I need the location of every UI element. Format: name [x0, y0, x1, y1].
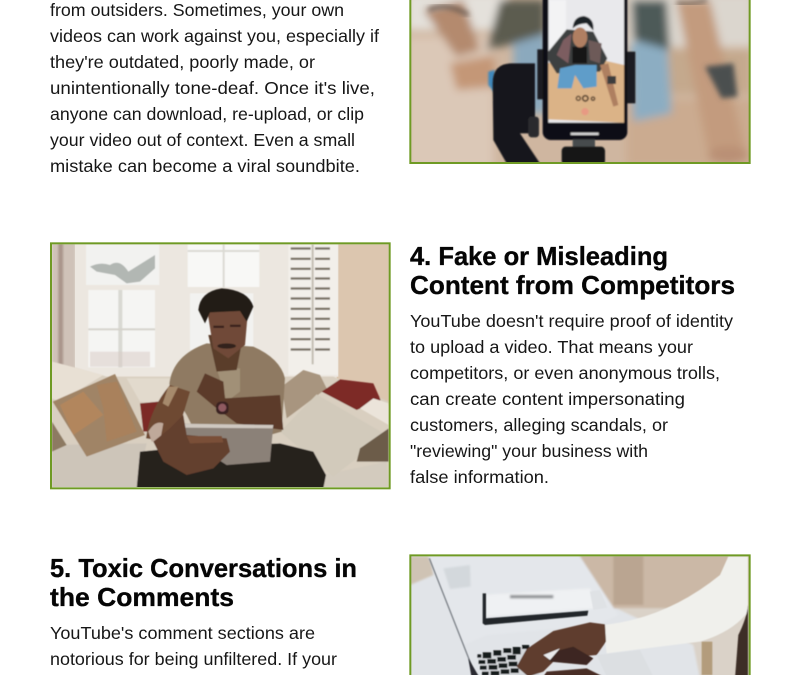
text block: section 5 body [50, 623, 337, 669]
text block: section 3 body: mistake can become a viral soundbite. [50, 156, 360, 176]
hand [517, 622, 606, 675]
text block: section 4 body: to upload a video. That means your [410, 337, 693, 357]
hand [153, 415, 230, 475]
heading: section 5: 5. Toxic Conversations in [50, 553, 357, 583]
frame: green border [410, 0, 750, 163]
text block: section 3 body: videos can work against you, especially if [50, 26, 379, 46]
text block: section 3 body [50, 0, 379, 176]
text block: section 4 body: YouTube doesn't require proof of identity [410, 311, 733, 331]
frame: green border [410, 555, 750, 675]
heading: section 4 [410, 241, 735, 300]
heading: section 4: Content from Competitors [410, 270, 735, 300]
photo: hands typing on a laptop [410, 555, 750, 675]
arms [146, 385, 190, 442]
text block: section 4 body [410, 311, 733, 487]
keyboard [477, 645, 540, 675]
sleeve [603, 556, 748, 653]
text block: section 3 body: from outsiders. Sometimes, your own [50, 0, 344, 20]
text block: section 3 body: they're outdated, poorly made, or [50, 52, 315, 72]
text block: section 4 body: competitors, or even anonymous trolls, [410, 363, 720, 383]
frame: green border [51, 243, 390, 488]
tablet [180, 424, 273, 465]
text block: section 3 body: your video out of context. Even a small [50, 130, 355, 150]
neck and head [208, 335, 243, 372]
photo: phone on gimbal filming a creator [407, 0, 753, 170]
text block: section 3 body: unintentionally tone-deaf. Once it's live, [50, 78, 375, 98]
torso [169, 343, 285, 435]
text block: section 4 body: can create content impersonating [410, 389, 685, 409]
text block: section 5 body: notorious for being unfiltered. If your [50, 649, 337, 669]
heading: section 5 [50, 553, 357, 612]
heading: section 4: 4. Fake or Misleading [410, 241, 668, 271]
text block: section 4 body: false information. [410, 467, 549, 487]
legs [137, 443, 326, 488]
text block: section 4 body: customers, alleging scandals, or [410, 415, 668, 435]
sofa [52, 376, 388, 487]
text block: section 5 body: YouTube's comment sections are [50, 623, 315, 643]
photo: man on sofa looking at tablet [50, 242, 390, 489]
text block: section 4 body: "reviewing" your business with [410, 441, 648, 461]
heading: section 5: the Comments [50, 582, 234, 612]
text block: section 3 body: anyone can download, re-upload, or clip [50, 104, 364, 124]
